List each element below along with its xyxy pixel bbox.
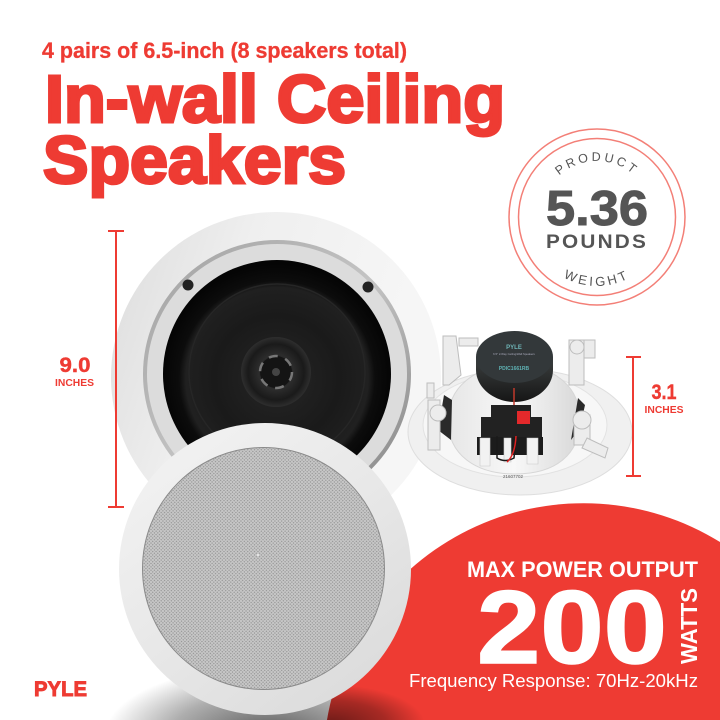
magnet cap: 6.5" 2-Way Ceiling/Wall Speakers <box>493 352 535 356</box>
heading line 2: Speakers <box>43 123 346 198</box>
serial sticker: 21607702 <box>503 474 524 479</box>
product weight badge: WEIGHT <box>566 269 625 286</box>
rear view speaker <box>408 331 632 495</box>
watts unit: WATTS <box>676 588 702 664</box>
200 value: 200 <box>477 570 667 686</box>
magnet cap: PDIC1661RB <box>499 366 530 372</box>
max power label: MAX POWER OUTPUT <box>467 557 699 582</box>
product weight badge: PRODUCT <box>554 152 638 175</box>
height dimension: 9.0 inches: INCHES <box>55 377 94 389</box>
rear bowl <box>448 365 580 474</box>
power output text <box>409 557 702 691</box>
mounting screws <box>182 280 374 292</box>
height dimension: 9.0 inches: 9.0 <box>60 354 90 377</box>
grille speaker, front <box>119 423 411 715</box>
height dimension: 9.0 inches <box>55 231 124 507</box>
depth dimension: 3.1 inches: INCHES <box>644 404 684 416</box>
terminal block <box>477 405 543 466</box>
flange <box>408 369 632 495</box>
subtitle: 4 pairs of 6.5-inch (8 speakers total) <box>42 38 407 63</box>
open ceiling speaker, front view <box>111 212 441 542</box>
magnet cap: PYLE <box>506 345 522 351</box>
product weight badge: POUNDS <box>546 232 648 253</box>
title group <box>42 38 505 198</box>
frequency response: Frequency Response: 70Hz-20kHz <box>409 670 698 691</box>
product weight badge: 5.36 <box>546 182 648 236</box>
magnet cap <box>476 331 553 402</box>
red power panel background <box>327 503 720 720</box>
depth dimension: 3.1 inches <box>626 357 684 476</box>
clamps <box>427 336 608 458</box>
Pyle logo: PYLE <box>34 678 87 701</box>
wires <box>513 388 515 406</box>
heading line 1: In-wall Ceiling <box>45 62 505 137</box>
tweeter <box>241 337 311 407</box>
depth dimension: 3.1 inches: 3.1 <box>652 381 677 404</box>
shadow on red panel <box>327 688 420 720</box>
product weight badge <box>508 128 686 306</box>
cast shadow beneath grille speaker <box>100 660 340 720</box>
